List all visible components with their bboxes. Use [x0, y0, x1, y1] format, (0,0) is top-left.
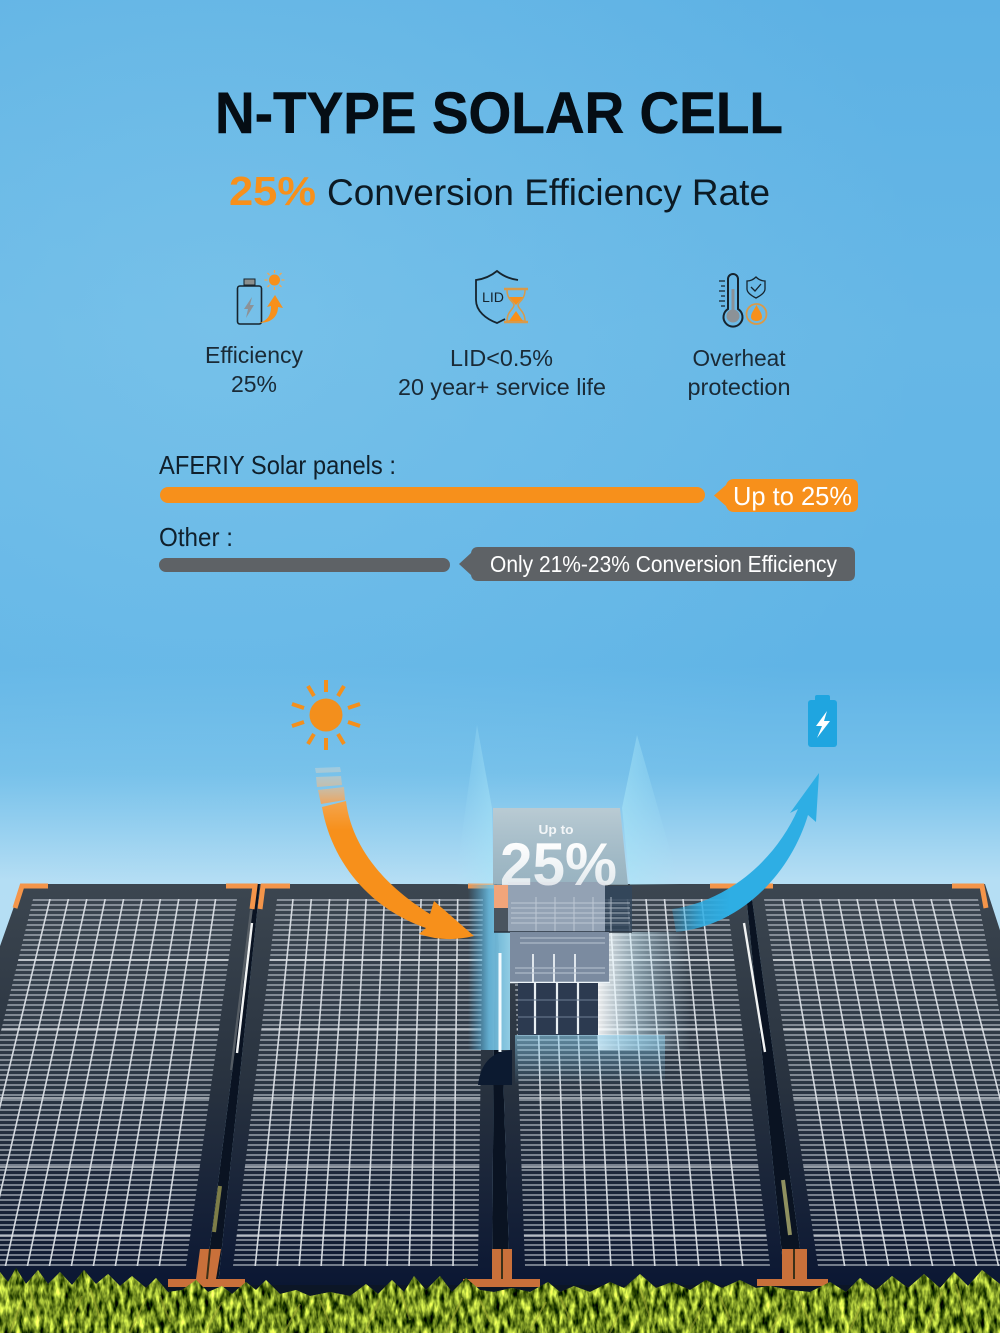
subtitle: 25% — [229, 168, 316, 214]
subtitle: Conversion Efficiency Rate — [327, 172, 770, 213]
grey tag: Only 21%-23% Conversion Efficiency — [490, 551, 837, 577]
comparison: AFERIY: AFERIY Solar panels : — [159, 450, 396, 480]
bracket seen through glass — [494, 885, 508, 908]
comparison: other: Other : — [159, 522, 233, 552]
arrow: power out — [672, 773, 819, 932]
comparison: AFERIY — [159, 450, 858, 512]
feature: LID: 20 year+ service life — [398, 374, 606, 400]
glass top layer — [493, 808, 628, 885]
orange tag: Up to 25% — [733, 481, 852, 511]
icon: shield with hourglass — [476, 271, 528, 323]
feature: LID: LID<0.5% — [450, 345, 553, 371]
bracket centre seams — [207, 1249, 794, 1279]
feature: efficiency: 25% — [231, 371, 277, 397]
percent callout: 25% — [500, 831, 617, 898]
panel cell rows and busbars — [0, 899, 1000, 1269]
arrow: sunlight in — [315, 767, 474, 939]
orange bar — [160, 487, 705, 503]
grey bar — [159, 558, 450, 572]
icon: thermometer with shield and flame — [719, 274, 766, 327]
ground shadow — [0, 1278, 1000, 1308]
feature: efficiency: Efficiency — [205, 342, 303, 368]
title: N-TYPE SOLAR CELL — [215, 81, 783, 146]
icon: battery with sun and arrow — [238, 270, 284, 324]
grass blades — [10, 1284, 966, 1333]
feature: overheat: protection — [688, 374, 790, 400]
orange corner brackets — [15, 886, 986, 909]
percent callout: Up to — [538, 822, 574, 837]
cell plate 3 — [518, 983, 598, 1035]
feature: LID — [398, 271, 606, 400]
grass — [0, 1262, 1000, 1333]
panel frames — [0, 884, 1000, 1285]
cell plate 1 — [508, 882, 605, 932]
exploded cell layers — [493, 808, 632, 1035]
solar panels — [0, 884, 1000, 1308]
feature: overheat — [688, 274, 790, 400]
glow column and haze over panels — [468, 885, 690, 1085]
comparison: other — [159, 522, 855, 581]
grey tag — [459, 547, 855, 581]
feature: efficiency — [205, 270, 303, 397]
feature: overheat: Overheat — [692, 345, 786, 371]
icon: shield with hourglass: LID — [482, 289, 504, 305]
panel hinge strips — [205, 884, 805, 1285]
orange bottom brackets — [168, 1249, 828, 1287]
icon: blue battery — [808, 695, 837, 747]
cell plate 2 — [510, 932, 609, 982]
icon: sun — [292, 680, 360, 750]
glowing light beams — [455, 725, 680, 885]
